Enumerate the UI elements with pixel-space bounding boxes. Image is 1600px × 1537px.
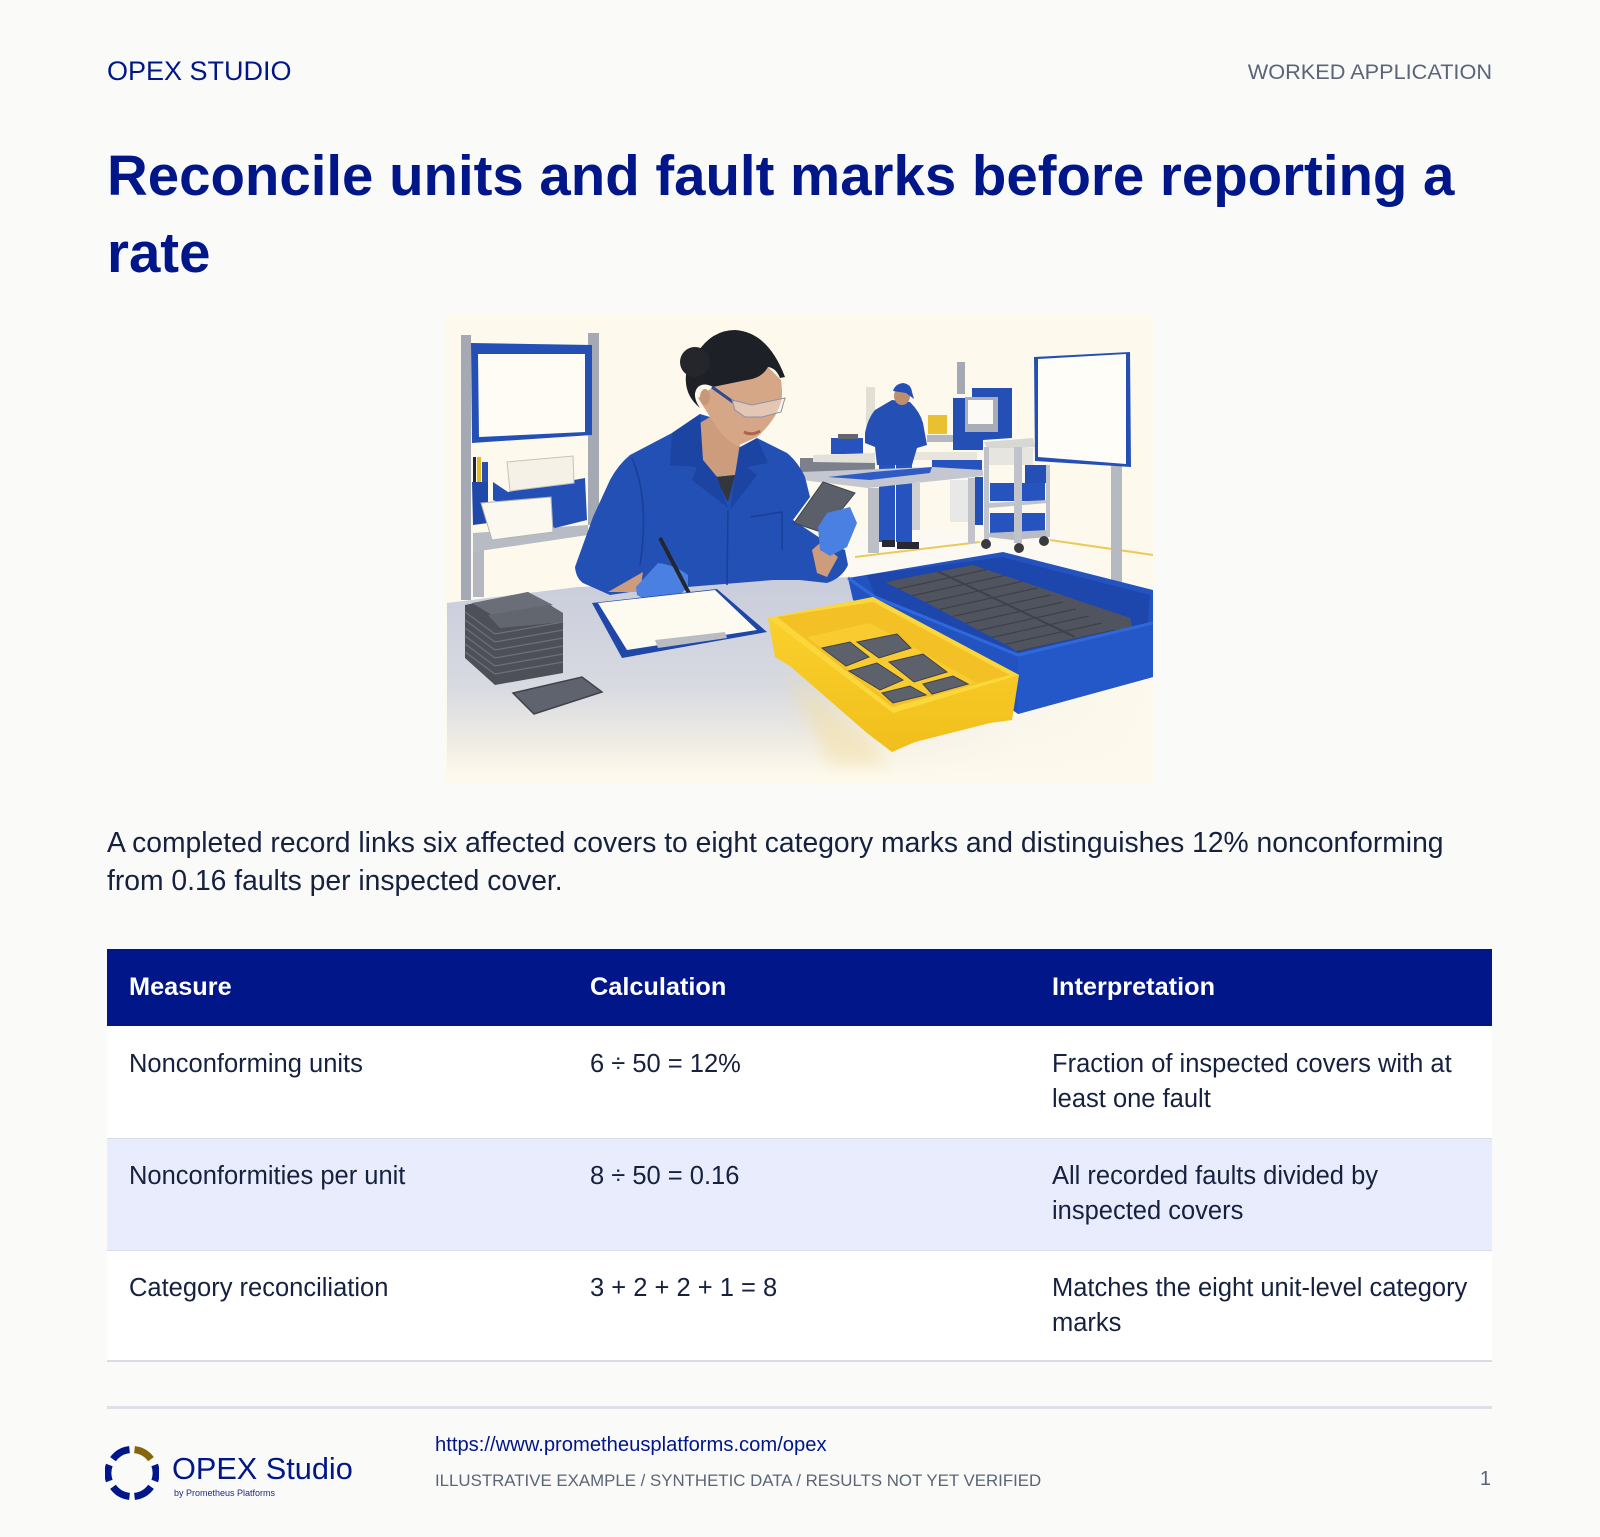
table header row: Interpretation [1052,973,1215,1001]
footer logo [105,1446,353,1500]
row: nonconforming units: Nonconforming units [129,1050,363,1078]
footer link: https://www.prometheusplatforms.com/opex [435,1434,827,1456]
row: nonconforming units: Fraction of inspected covers with at [1052,1050,1452,1078]
header: section label: WORKED APPLICATION [1248,59,1492,84]
row: category reconciliation: 3 + 2 + 2 + 1 = 8 [590,1274,777,1302]
row: category reconciliation: Category reconciliation [129,1274,388,1302]
row: category reconciliation: Matches the eight unit-level category [1052,1274,1467,1302]
results table [107,949,1492,1362]
row: nonconformities per unit: All recorded faults divided by [1052,1162,1378,1190]
row: category reconciliation: marks [1052,1309,1121,1337]
floor and yellow safety lines [845,530,1153,590]
summary paragraph [107,826,1444,896]
footer disclaimer: ILLUSTRATIVE EXAMPLE / SYNTHETIC DATA / RESULTS NOT YET VERIFIED [435,1471,1041,1490]
inspector [575,330,857,602]
clipboard [592,589,767,658]
table header row [107,949,1492,1026]
right blank board on post [1034,352,1131,582]
summary paragraph: A completed record links six affected covers to eight category marks and distinguishes 12% nonconforming [107,826,1444,858]
logo byline: by Prometheus Platforms [174,1488,275,1498]
row: nonconformities per unit [107,1139,1492,1251]
row: nonconformities per unit: inspected covers [1052,1197,1243,1225]
title: rate [107,220,210,284]
title [107,144,1455,284]
left rack with blank board and shelf [461,333,599,600]
workbench surface [447,577,1153,784]
header: brand label: OPEX STUDIO [107,56,292,86]
row: nonconformities per unit: Nonconformities per unit [129,1162,405,1190]
blue bin with rows of covers [848,552,1153,714]
row: nonconformities per unit: 8 ÷ 50 = 0.16 [590,1162,739,1190]
table header row: Measure [129,973,232,1001]
background workbench [800,434,983,543]
stack of covers [465,592,563,685]
row: nonconforming units: least one fault [1052,1085,1211,1113]
row: nonconforming units: 6 ÷ 50 = 12% [590,1050,741,1078]
single cover on bench [513,677,602,714]
background worker [865,383,927,549]
icon: segmented ring [105,1446,159,1500]
title: Reconcile units and fault marks before reporting a [107,144,1454,207]
row: nonconforming units [107,1026,1492,1139]
logo wordmark: OPEX Studio [172,1451,353,1486]
background cart with bins [981,438,1050,553]
background machine [866,362,1012,450]
bench top in front of worker [800,467,983,553]
illustration: inspector reconciling covers at a workbench [446,314,1153,784]
table header row: Calculation [590,973,726,1001]
row: category reconciliation [107,1251,1492,1362]
yellow tray with flagged covers [768,597,1019,752]
summary paragraph: from 0.16 faults per inspected cover. [107,864,563,896]
page number: 1 [1480,1468,1491,1490]
